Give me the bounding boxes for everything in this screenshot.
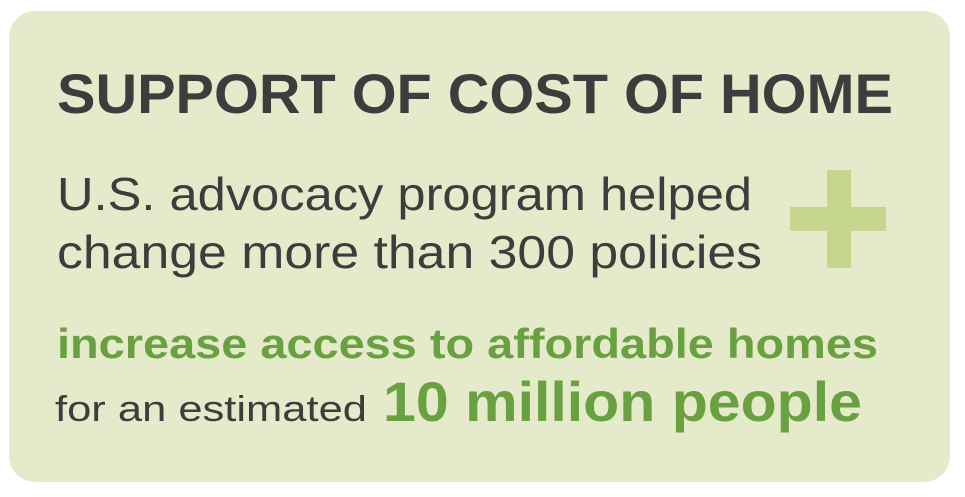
text block: advocacy program bbox=[57, 168, 762, 278]
icon: plus sign bbox=[790, 170, 886, 268]
text block: advocacy program: change more than 300 policies bbox=[57, 226, 762, 278]
text block: increase access: increase access to affordable homes bbox=[57, 320, 878, 367]
text block: advocacy program: U.S. advocacy program helped bbox=[57, 168, 752, 220]
text block: for an estimated 10 million people: 10 million people bbox=[383, 370, 862, 433]
text block: for an estimated 10 million people: for an estimated bbox=[55, 388, 367, 429]
title: SUPPORT OF COST OF HOME bbox=[57, 62, 893, 125]
text block: for an estimated 10 million people bbox=[55, 370, 862, 433]
